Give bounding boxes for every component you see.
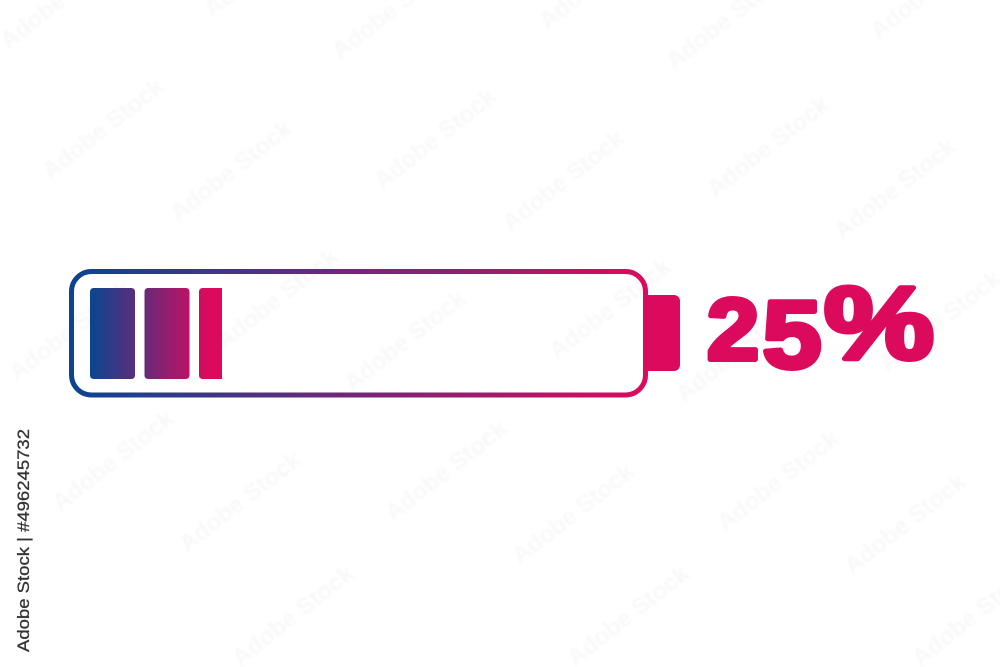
charge bar 2	[144, 288, 190, 379]
charge bar 1	[90, 288, 135, 379]
watermark pattern: Adobe Stock	[174, 446, 307, 558]
watermark pattern: Adobe Stock	[497, 125, 630, 237]
watermark pattern: Adobe Stock	[544, 253, 677, 365]
watermark pattern: Adobe Stock	[37, 73, 170, 185]
percentage label: %	[824, 266, 934, 380]
stock image id: Adobe Stock | #496245732	[14, 429, 33, 652]
battery icon	[72, 272, 680, 395]
charge bar 3	[199, 288, 222, 379]
watermark pattern: Adobe Stock	[671, 296, 804, 408]
battery terminal cap	[648, 295, 680, 371]
watermark pattern: Adobe Stock	[369, 83, 502, 195]
watermark pattern: Adobe Stock	[47, 405, 180, 517]
watermark pattern: Adobe Stock	[339, 285, 472, 397]
watermark pattern: Adobe Stock	[839, 468, 972, 580]
percentage label	[707, 266, 934, 388]
watermark pattern: Adobe Stock	[165, 115, 298, 227]
watermark pattern: Adobe Stock	[702, 91, 835, 203]
watermark pattern: Adobe Stock	[211, 243, 344, 355]
percentage label: 2	[707, 282, 759, 378]
watermark pattern: Adobe Stock	[4, 275, 137, 387]
watermark pattern: Adobe Stock	[507, 458, 640, 570]
battery shell outline	[72, 272, 646, 395]
watermark pattern: Adobe Stock	[380, 415, 513, 527]
watermark pattern: Adobe Stock	[712, 425, 845, 537]
watermark pattern: Adobe Stock	[829, 133, 962, 245]
charge level bars	[90, 288, 222, 379]
percentage label: 5	[762, 282, 822, 388]
